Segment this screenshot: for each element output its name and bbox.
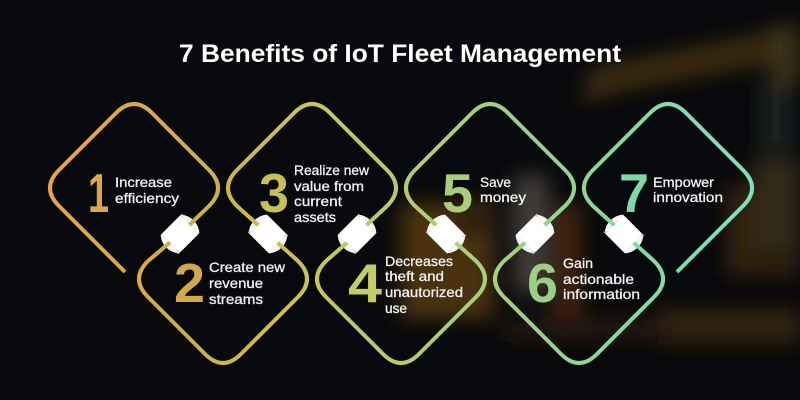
benefit 2: 2: [174, 252, 205, 314]
benefit 3: assets: [294, 209, 336, 225]
benefit 4: Decreases: [385, 253, 453, 269]
connector 3-4: [336, 213, 378, 255]
benefit 3: Realize new: [294, 162, 370, 178]
benefit 6: [527, 252, 640, 314]
benefit 3: 3: [259, 162, 289, 224]
benefit 7: innovation: [653, 189, 723, 205]
benefit 3: [259, 162, 370, 225]
benefit 4: 4: [348, 252, 382, 314]
benefit 6: Gain: [563, 255, 593, 271]
benefit 6: actionable: [563, 271, 634, 287]
title: 7 Benefits of IoT Fleet Management: [179, 40, 622, 68]
benefit 7: 7: [619, 162, 649, 224]
benefit 4: theft and: [385, 268, 444, 284]
benefit 5: Save: [480, 174, 511, 190]
benefit 5: [442, 162, 526, 224]
benefit 1: [88, 162, 179, 224]
benefit 4: [348, 252, 463, 316]
benefit 5: 5: [442, 162, 473, 224]
snake line through seven diamonds: [50, 104, 752, 363]
connector 4-5: [425, 213, 467, 255]
benefit 4: unautorized: [385, 284, 463, 300]
connector 6-7: [603, 213, 645, 255]
benefit 7: [619, 162, 723, 224]
benefit 2: Create new: [209, 259, 286, 275]
connector 2-3: [247, 213, 289, 255]
benefit 2: streams: [209, 291, 263, 307]
benefit 2: revenue: [209, 275, 263, 291]
benefit 5: money: [480, 189, 526, 205]
connector 1-2: [159, 213, 201, 255]
benefit 1: Increase: [115, 174, 172, 190]
benefit 6: 6: [527, 252, 558, 314]
benefit 3: current: [294, 193, 342, 209]
benefit 6: information: [563, 286, 640, 302]
connector 5-6: [514, 213, 556, 255]
benefit 2: [174, 252, 286, 314]
benefit 1: efficiency: [115, 190, 179, 206]
benefit 4: use: [385, 300, 407, 316]
benefit 7: Empower: [653, 174, 714, 190]
connector backs: [157, 211, 647, 257]
benefit 3: value from: [294, 178, 364, 194]
benefit 1: 1: [88, 162, 109, 224]
